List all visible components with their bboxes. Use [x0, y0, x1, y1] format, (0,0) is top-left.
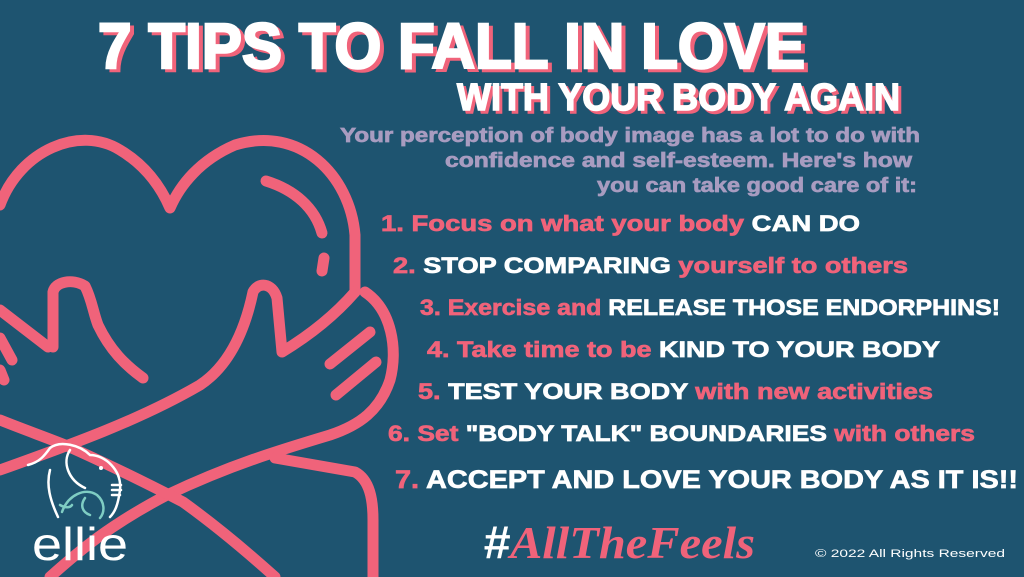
highlight [266, 181, 322, 233]
tip 7: 7. ACCEPT AND LOVE YOUR BODY AS IT IS!! [395, 466, 1018, 494]
lower crossing arm [0, 420, 275, 577]
subtitle: WITH YOUR BODY AGAIN [457, 77, 900, 119]
intro paragraph: Your perception of body image has a lot to do with [340, 125, 920, 147]
tip 6: 6. Set "BODY TALK" BOUNDARIES with others [388, 421, 975, 446]
title: 7 TIPS TO FALL IN LOVE [98, 10, 805, 82]
tip 1: 1. Focus on what your body CAN DO [381, 211, 860, 236]
tips list [381, 211, 1018, 494]
heart outline top [0, 140, 355, 292]
hashtag: #AllTheFeels [483, 516, 755, 568]
copyright: © 2022 All Rights Reserved [815, 548, 1005, 560]
tip 5: 5. TEST YOUR BODY with new activities [418, 379, 933, 404]
logo: ellie elephant [28, 444, 128, 570]
right hand / heart lower edge [0, 285, 355, 470]
intro paragraph: confidence and self-esteem. Here's how [445, 150, 913, 172]
icon: elephant [28, 444, 121, 518]
illustration: heart hug [0, 140, 393, 577]
tip 2: 2. STOP COMPARING yourself to others [393, 253, 908, 278]
text: ellie: ellie [32, 518, 128, 570]
intro paragraph: you can take good care of it: [597, 175, 917, 197]
tip 3: 3. Exercise and RELEASE THOSE ENDORPHINS! [420, 295, 1000, 320]
title: 7 TIPS TO FALL IN LOVE [102, 13, 809, 85]
subtitle: WITH YOUR BODY AGAIN [460, 80, 903, 122]
intro paragraph [340, 125, 920, 197]
tip 4: 4. Take time to be KIND TO YOUR BODY [427, 337, 940, 362]
right arm outer [50, 292, 393, 577]
left hand [0, 282, 143, 378]
